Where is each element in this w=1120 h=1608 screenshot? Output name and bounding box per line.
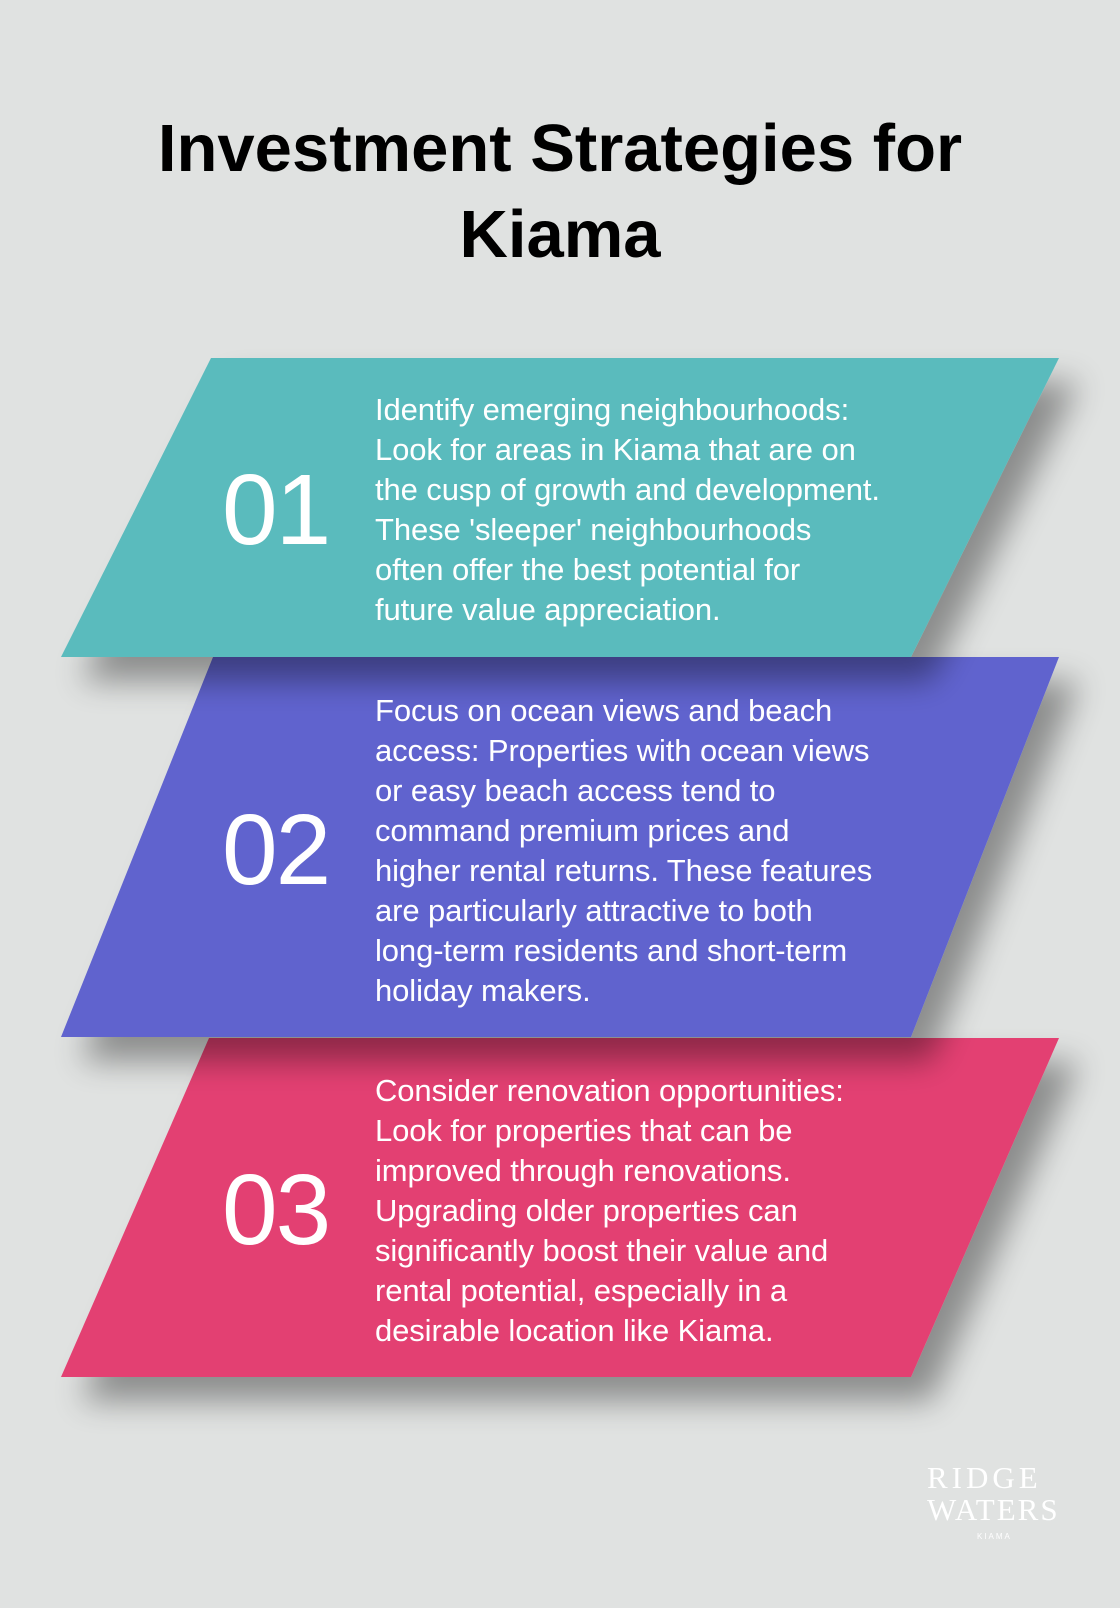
logo: WATERS: [927, 1492, 1060, 1527]
panel 2: text: holiday makers.: [375, 973, 591, 1008]
panel 3: text: rental potential, especially in a: [375, 1273, 787, 1308]
panel 2: text: are particularly attractive to both: [375, 893, 813, 928]
panel 3: text: Look for properties that can be: [375, 1113, 792, 1148]
panel 3: text: Consider renovation opportunities:: [375, 1073, 844, 1108]
panel 2: number: 02: [222, 794, 329, 906]
title: [158, 111, 962, 272]
panel 2: text: [375, 693, 872, 1008]
logo: RIDGE: [927, 1460, 1042, 1495]
panel 3: text: improved through renovations.: [375, 1153, 791, 1188]
title: Investment Strategies for: [158, 111, 962, 186]
panel 1: number: 01: [222, 454, 329, 566]
logo: [927, 1460, 1060, 1541]
panel 3: text: significantly boost their value and: [375, 1233, 828, 1268]
logo: KIAMA: [977, 1532, 1012, 1541]
panel 2: text: higher rental returns. These features: [375, 853, 872, 888]
panel 2: text: long-term residents and short-term: [375, 933, 847, 968]
panel 2 shape: [61, 657, 1059, 1037]
panel 3 shape: [61, 1038, 1059, 1377]
panel 1: text: Look for areas in Kiama that are on: [375, 432, 856, 467]
panel 2: text: command premium prices and: [375, 813, 789, 848]
panel 1: text: the cusp of growth and development.: [375, 472, 880, 507]
panel 3: text: desirable location like Kiama.: [375, 1313, 774, 1348]
panel 1: text: Identify emerging neighbourhoods:: [375, 392, 849, 427]
panel 3: text: [375, 1073, 844, 1348]
panel 1: text: These 'sleeper' neighbourhoods: [375, 512, 811, 547]
panel 2: text: access: Properties with ocean views: [375, 733, 869, 768]
panel 2: text: Focus on ocean views and beach: [375, 693, 832, 728]
panel 1: text: future value appreciation.: [375, 592, 721, 627]
panel 2: text: or easy beach access tend to: [375, 773, 775, 808]
panel 3: number: 03: [222, 1154, 329, 1266]
panel 1 shape: [61, 358, 1059, 657]
panel 3: text: Upgrading older properties can: [375, 1193, 798, 1228]
title: Kiama: [459, 197, 661, 272]
panel 1: text: often offer the best potential for: [375, 552, 800, 587]
panel 1: text: [375, 392, 880, 627]
